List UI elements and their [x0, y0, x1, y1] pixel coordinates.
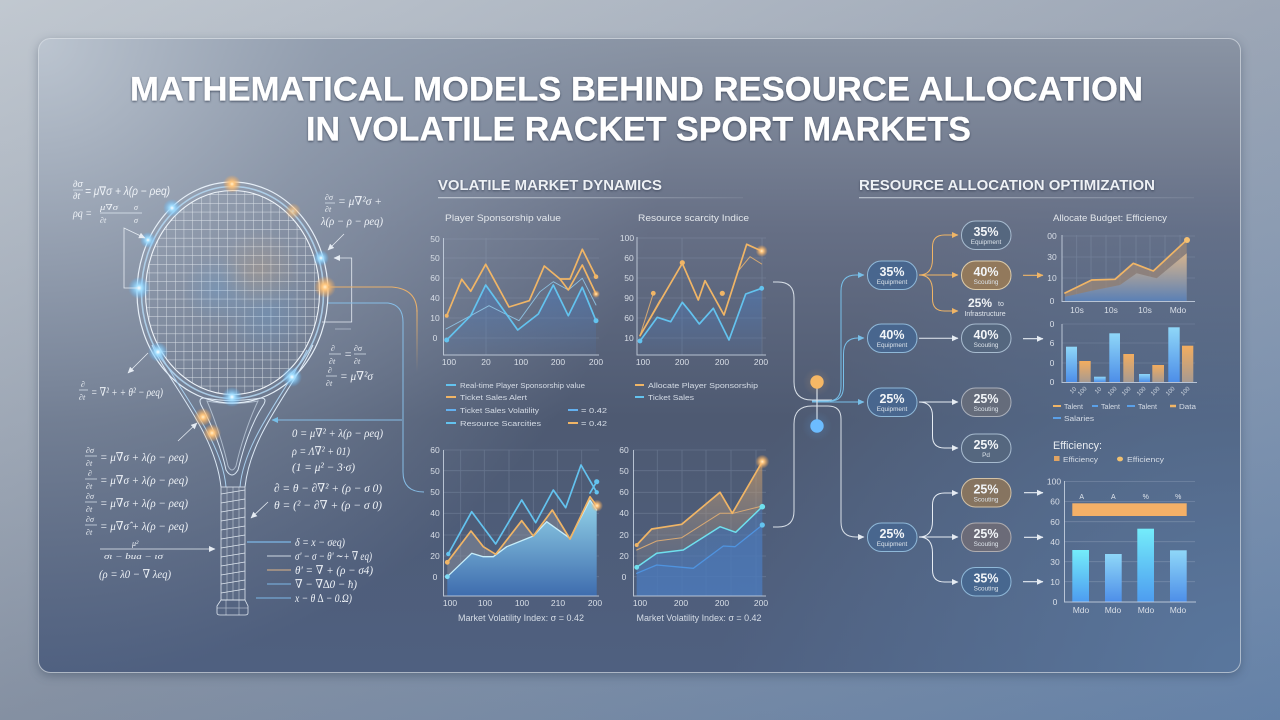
chart: market volatility area right: 60 — [619, 445, 629, 455]
equations right of head: ∂ — [328, 366, 332, 375]
equations upper right: ∂t — [325, 205, 332, 214]
chart: talent bars: 0 — [1050, 319, 1055, 329]
chart: allocate budget efficiency: 30 — [1047, 252, 1057, 262]
equation stack lower left: ∂ — [88, 469, 92, 478]
chart: allocate budget efficiency: Mdo — [1170, 305, 1187, 315]
hub nodes orange and blue — [802, 368, 832, 441]
node 25% scouting tan: 25% — [973, 482, 999, 496]
equations upper left — [72, 179, 170, 225]
legend: market dynamics: = 0.42 — [581, 419, 607, 428]
chart: market volatility area left — [430, 445, 603, 623]
equation left of throat: = ∇² + + θ² − ρeq) — [91, 385, 163, 399]
node 35% scouting blue: Scouting — [974, 586, 999, 592]
chart: player sponsorship value: 100 — [442, 357, 456, 367]
equations right of head: ∂t — [326, 379, 333, 388]
chart: efficiency bars: A — [1111, 494, 1116, 501]
chart: player sponsorship value: 40 — [430, 293, 440, 303]
chart: market volatility area right: Market Volatility Index: σ = 0.42 — [636, 613, 762, 623]
equation stack lower left: σι − bua − ισ — [104, 552, 164, 561]
chart: market volatility area right: 50 — [619, 466, 629, 476]
chart: talent bars: 10 — [1094, 386, 1104, 395]
chart: talent bars — [1050, 319, 1197, 397]
chart: resource scarcity index: 200 — [754, 357, 768, 367]
chart: market volatility area left: 50 — [430, 487, 440, 497]
chart: player sponsorship value: 0 — [433, 333, 438, 343]
chart: player sponsorship value: 20 — [481, 357, 491, 367]
equations right of head: = — [344, 347, 352, 361]
label 25% to infrastructure: 25% — [968, 296, 992, 310]
legend: talent bars: Talent — [1101, 402, 1121, 411]
chart: resource scarcity index — [620, 213, 768, 367]
chart: talent bars: 0 — [1050, 377, 1055, 387]
node 25% scouting: Scouting — [974, 406, 999, 413]
chart: market volatility area left: 60 — [430, 445, 440, 455]
legend: talent bars — [1053, 402, 1197, 423]
chart: market volatility area left: 50 — [430, 466, 440, 476]
handle equation list: δ = x − σeq) — [295, 535, 345, 549]
node 40% scouting — [962, 261, 1011, 290]
chart: efficiency bars: 30 — [1050, 557, 1060, 567]
chart: market volatility area right — [619, 445, 769, 623]
efficiency heading and legend: Efficiency: — [1053, 440, 1102, 452]
node 40% scouting — [962, 324, 1011, 352]
equation stack lower left: ∂t — [86, 459, 93, 468]
chart: talent bars: 10 — [1069, 386, 1079, 395]
chart: allocate budget efficiency: 10 — [1047, 273, 1057, 283]
efficiency heading and legend: Efficiency — [1063, 455, 1098, 464]
chart: efficiency bars: 60 — [1050, 496, 1060, 506]
handle equation list: x − θ ∆ − 0.Ω) — [294, 591, 352, 605]
chart: talent bars: 100 — [1136, 386, 1148, 397]
node 25% scouting tan: Scouting — [974, 496, 999, 504]
chart: efficiency bars: 100 — [1047, 476, 1061, 486]
chart: resource scarcity index: 90 — [624, 293, 634, 303]
chart: efficiency bars: % — [1143, 494, 1149, 501]
chart: talent bars: 100 — [1121, 386, 1133, 397]
chart: talent bars: 100 — [1180, 386, 1192, 397]
equation stack lower left: ∂σ — [86, 446, 95, 455]
equation left of throat — [79, 380, 163, 402]
node 25% scouting gray — [962, 523, 1011, 552]
chart: efficiency bars: 10 — [1050, 577, 1060, 587]
equation stack lower left: μ² — [131, 539, 139, 548]
node 25% pd — [962, 434, 1011, 462]
chart: market volatility area right: 200 — [715, 598, 729, 608]
chart: player sponsorship value: 200 — [589, 357, 603, 367]
legend: talent bars: Data — [1179, 402, 1197, 411]
chart: efficiency bars: Mdo — [1073, 605, 1090, 615]
legend: market dynamics: Resource Scarcities — [460, 419, 541, 428]
chart: market volatility area right: 20 — [619, 551, 629, 561]
chart: market volatility area left: 0 — [433, 572, 438, 582]
flow connectors — [773, 235, 958, 582]
title: IN VOLATILE RACKET SPORT MARKETS — [306, 110, 971, 148]
chart: resource scarcity index: 100 — [620, 233, 634, 243]
node 35% equipment: 35% — [973, 225, 999, 239]
equation stack lower left: = μ∇σ + λ(ρ − ρeq) — [100, 473, 188, 487]
equation stack lower left: ∂σ — [86, 515, 95, 524]
equations right of head: ∂t — [329, 357, 336, 366]
legend: market dynamics: Real-time Player Sponsorship value — [460, 381, 585, 390]
racket throat — [152, 345, 313, 487]
chart: resource scarcity index: 60 — [624, 313, 634, 323]
equations upper left: = μ∇σ + λ(ρ − ρeq) — [85, 184, 170, 198]
chart: market volatility area right: 60 — [619, 487, 629, 497]
chart: market volatility area left: 20 — [430, 551, 440, 561]
equations upper right — [320, 193, 383, 228]
chart: player sponsorship value: 50 — [430, 253, 440, 263]
node 25% pd: 25% — [973, 438, 999, 452]
equations right of head: ∂t — [354, 357, 361, 366]
node 40% equipment: 40% — [879, 328, 905, 342]
equations upper left: σ — [134, 203, 139, 212]
chart: efficiency bars: Mdo — [1170, 605, 1187, 615]
chart: player sponsorship value: 60 — [430, 273, 440, 283]
node 25% equipment lower: 25% — [879, 527, 905, 541]
label 25% to infrastructure: to — [998, 301, 1004, 308]
chart: efficiency bars: 40 — [1050, 537, 1060, 547]
chart: player sponsorship value: 100 — [514, 357, 528, 367]
efficiency heading and legend: Efficiency — [1127, 455, 1164, 464]
node 35% scouting blue — [962, 568, 1011, 596]
node 25% equipment lower — [868, 523, 917, 552]
node 40% scouting: Scouting — [974, 279, 999, 286]
chart: market volatility area right: 40 — [619, 508, 629, 518]
heading: resource allocation optimization: RESOURCE ALLOCATION OPTIMIZATION — [859, 177, 1155, 194]
chart: market volatility area right: 20 — [619, 530, 629, 540]
chart: market volatility area right: 200 — [754, 598, 768, 608]
chart: talent bars: 0 — [1050, 358, 1055, 368]
chart: player sponsorship value: Player Sponsorship value — [445, 213, 561, 224]
equations upper left: ρq = — [72, 206, 92, 220]
chart: market volatility area left: Market Volatility Index: σ = 0.42 — [458, 613, 584, 623]
legend: market dynamics — [446, 381, 758, 428]
equations upper left: ∂t — [100, 216, 107, 225]
node 40% equipment: Equipment — [877, 342, 907, 349]
equations right of head: ∂ — [331, 344, 335, 353]
chart: resource scarcity index: 200 — [715, 357, 729, 367]
equation stack lower left — [85, 446, 188, 581]
chart: talent bars: 6 — [1050, 338, 1055, 348]
node 35% scouting blue: 35% — [973, 572, 999, 586]
node 40% scouting: 40% — [973, 265, 999, 279]
node 25% equipment: 25% — [879, 392, 905, 406]
chart: market volatility area left: 40 — [430, 508, 440, 518]
chart: efficiency bars: % — [1175, 494, 1181, 501]
chart: player sponsorship value: 50 — [430, 234, 440, 244]
chart: efficiency bars — [1047, 476, 1196, 615]
chart: efficiency bars: Mdo — [1105, 605, 1122, 615]
equations upper left: μ∇σ — [99, 203, 119, 212]
node 25% scouting: 25% — [973, 392, 999, 406]
chart: market volatility area right: 0 — [622, 572, 627, 582]
arrows from nodes to charts — [1023, 275, 1043, 582]
glow nodes on the frame — [128, 175, 336, 442]
chart: player sponsorship value: 10 — [430, 313, 440, 323]
chart: resource scarcity index: 60 — [624, 253, 634, 263]
chart: allocate budget efficiency: 10s — [1138, 305, 1152, 315]
chart: efficiency bars: 0 — [1053, 597, 1058, 607]
legend: market dynamics: Ticket Sales Alert — [460, 393, 528, 402]
node 25% equipment: Equipment — [877, 406, 907, 413]
racket string bed — [146, 190, 320, 394]
handle equation list: ∇ − ∇∆0 − ħ) — [295, 577, 357, 591]
chart: talent bars: 100 — [1107, 386, 1119, 397]
title: MATHEMATICAL MODELS BEHIND RESOURCE ALLOCATION — [130, 70, 1143, 108]
equation stack lower left: ∂t — [86, 505, 93, 514]
node 40% equipment — [868, 324, 917, 352]
chart: resource scarcity index: 100 — [636, 357, 650, 367]
equations upper left: ∂t — [73, 191, 80, 201]
equation stack lower left: = μ∇σ̂ + λ(ρ − ρeq) — [100, 519, 188, 533]
equation stack lower left: (ρ = λ0 − ∇ λeq) — [99, 567, 171, 581]
equation stack right of throat: 0 = μ∇² + λ(ρ − ρeq) — [292, 426, 383, 440]
chart: talent bars: 100 — [1150, 386, 1162, 397]
node 25% scouting tan — [962, 478, 1011, 507]
equations upper left: σ — [134, 216, 139, 225]
label 25% to infrastructure: Infrastructure — [964, 311, 1006, 318]
node 35% equipment: Equipment — [877, 279, 907, 286]
node 35% equipment: Equipment — [971, 239, 1001, 246]
chart: allocate budget efficiency: 10s — [1070, 305, 1084, 315]
chart: allocate budget efficiency: 10s — [1104, 305, 1118, 315]
equations upper right: = μ∇²σ + — [338, 194, 382, 208]
allocation nodes column 1 — [868, 261, 917, 552]
equation stack right of throat: θ = (² − ∂∇ + (ρ − σ 0) — [274, 498, 382, 512]
allocation nodes column 2 — [962, 221, 1011, 596]
node 25% scouting gray: 25% — [973, 527, 999, 541]
equation stack right of throat: ∂ = θ − ∂∇² + (ρ − σ 0) — [274, 481, 382, 495]
equation stack right of throat: ρ = Λ∇² + 01) — [291, 444, 350, 458]
connectors from racket to market charts — [272, 287, 424, 492]
efficiency heading and legend — [1053, 440, 1164, 464]
equations upper left: ∂σ — [73, 179, 83, 189]
legend: talent bars: Talent — [1138, 402, 1158, 411]
equation left of throat: ∂t — [79, 393, 86, 402]
node 25% equipment — [868, 388, 917, 416]
node 25% pd: Pd — [982, 452, 990, 459]
heading: volatile market dynamics: VOLATILE MARKET DYNAMICS — [438, 177, 662, 194]
chart: market volatility area left: 210 — [551, 598, 565, 608]
equations right of head: = μ∇²σ — [340, 369, 374, 383]
equation stack lower left: = μ∇σ + λ(ρ − ρeq) — [100, 496, 188, 510]
chart: efficiency bars: Mdo — [1138, 605, 1155, 615]
chart: market volatility area left: 100 — [478, 598, 492, 608]
chart: allocate budget efficiency: Allocate Budget: Efficiency — [1053, 213, 1167, 224]
node 35% equipment: 35% — [879, 265, 905, 279]
equations upper right: ∂σ — [325, 193, 334, 202]
node 25% equipment lower: Equipment — [877, 541, 907, 548]
chart: market volatility area left: 200 — [588, 598, 602, 608]
chart: resource scarcity index: 50 — [624, 273, 634, 283]
chart: efficiency bars: 60 — [1050, 517, 1060, 527]
legend: talent bars: Talent — [1064, 402, 1084, 411]
equation left of throat: ∂ — [81, 380, 85, 389]
legend: market dynamics: Ticket Sales — [648, 393, 694, 402]
equation stack right of throat — [274, 426, 383, 512]
legend: market dynamics: = 0.42 — [581, 406, 607, 415]
node 25% scouting gray: Scouting — [974, 541, 999, 548]
equation stack lower left: ∂t — [86, 482, 93, 491]
racket annotation arrows — [100, 228, 352, 549]
chart: player sponsorship value: 200 — [551, 357, 565, 367]
equation stack right of throat: (1 = μ² − 3·σ) — [292, 460, 355, 474]
chart: talent bars: 100 — [1165, 386, 1177, 397]
handle equation list: σ' − σ − θ' ∼+ ∇ eq) — [295, 549, 372, 563]
legend: talent bars: Salaries — [1064, 414, 1094, 423]
label 25% to infrastructure — [964, 296, 1006, 318]
node 40% scouting: 40% — [973, 328, 999, 342]
chart: allocate budget efficiency: 0 — [1050, 296, 1055, 306]
equation stack lower left: = μ∇σ + λ(ρ − ρeq) — [100, 450, 188, 464]
chart: allocate budget efficiency — [1047, 213, 1195, 315]
racket diagram with glowing nodes — [128, 175, 336, 615]
racket handle — [217, 487, 248, 615]
legend: market dynamics: Ticket Sales Volatility — [460, 406, 539, 415]
chart: resource scarcity index: Resource scarcity Indice — [638, 213, 749, 224]
chart: market volatility area left: 100 — [515, 598, 529, 608]
equations right of head — [326, 344, 374, 388]
handle equation list — [247, 535, 373, 605]
chart: allocate budget efficiency: 00 — [1047, 231, 1057, 241]
node 40% scouting: Scouting — [974, 342, 999, 349]
equations right of head: ∂σ — [354, 344, 363, 353]
chart: market volatility area right: 100 — [633, 598, 647, 608]
equations upper right: λ(ρ − ρ − ρeq) — [320, 214, 383, 228]
chart: resource scarcity index: 200 — [675, 357, 689, 367]
node 35% equipment — [868, 261, 917, 290]
node 35% equipment — [962, 221, 1011, 250]
chart: market volatility area left: 100 — [443, 598, 457, 608]
chart: talent bars: 100 — [1077, 386, 1089, 397]
orange efficiency band — [1072, 503, 1187, 516]
handle equation list: θ' = ∇ + (ρ − σ4) — [295, 563, 373, 577]
legend: market dynamics: Allocate Player Sponsorship — [648, 381, 758, 390]
chart: resource scarcity index: 10 — [624, 333, 634, 343]
equation stack lower left: ∂t — [86, 528, 93, 537]
node 25% scouting — [962, 388, 1011, 416]
chart: efficiency bars: A — [1079, 494, 1084, 501]
chart: player sponsorship value — [430, 213, 603, 367]
chart: market volatility area right: 200 — [674, 598, 688, 608]
title — [130, 70, 1143, 148]
racket head frame — [137, 182, 328, 403]
equation stack lower left: ∂σ — [86, 492, 95, 501]
chart: market volatility area left: 40 — [430, 530, 440, 540]
